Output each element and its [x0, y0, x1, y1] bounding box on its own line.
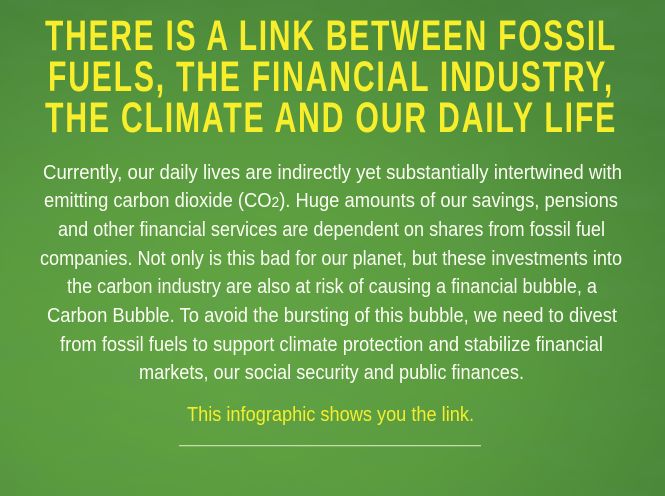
intro text block: companies. Not only is this bad for our planet, but these investments into — [40, 248, 622, 270]
callout: infographic link: This infographic shows you the link. — [187, 404, 474, 426]
intro text block: markets, our social security and public finances. — [139, 362, 524, 384]
intro text block: from fossil fuels to support climate protection and stabilize financial — [60, 334, 603, 356]
intro text block: the carbon industry are also at risk of causing a financial bubble, a — [67, 276, 598, 298]
intro text block: emitting carbon dioxide (CO2). Huge amounts of our savings, pensions — [44, 190, 618, 212]
intro text block: and other financial services are dependent on shares from fossil fuel — [58, 219, 605, 241]
title — [45, 12, 617, 142]
intro text block: Carbon Bubble. To avoid the bursting of this bubble, we need to divest — [47, 305, 617, 327]
intro text block: Currently, our daily lives are indirectly yet substantially intertwined with — [43, 162, 622, 184]
intro text block — [40, 162, 622, 384]
